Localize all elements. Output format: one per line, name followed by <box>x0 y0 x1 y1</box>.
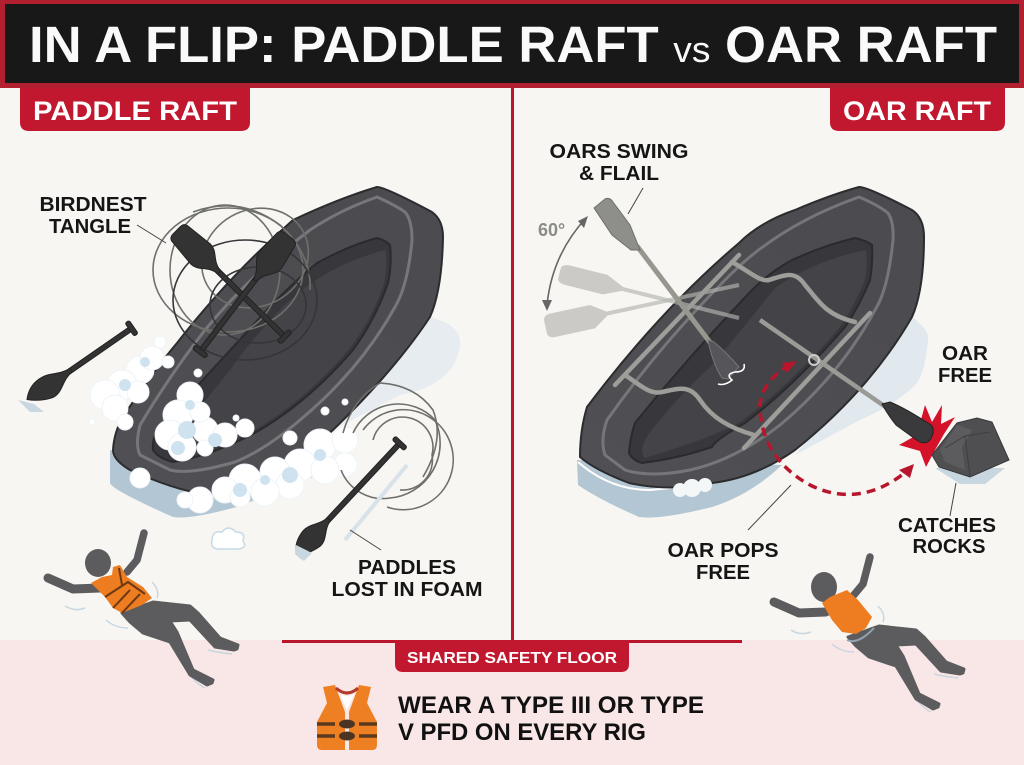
floor <box>629 238 872 463</box>
title: IN A FLIP: PADDLE RAFT vs OAR RAFT <box>29 16 997 73</box>
label: catches rocks: CATCHES <box>898 515 996 537</box>
swimmer left <box>48 533 238 688</box>
label: paddles lost in foam: LOST IN FOAM <box>332 579 482 601</box>
tab: shared safety floor <box>395 640 629 672</box>
oar blade <box>882 402 933 443</box>
raft hull <box>113 187 443 494</box>
oar swinging <box>594 198 744 384</box>
safety floor band <box>0 640 1024 765</box>
lost paddle left <box>18 318 141 412</box>
swimmer life vest <box>91 565 152 613</box>
water shadow <box>795 317 928 455</box>
label: oar free <box>938 343 992 387</box>
safety message: V PFD ON EVERY RIG <box>398 719 646 746</box>
raft floor <box>153 238 391 462</box>
label: oars swing and flail: OARS SWING <box>550 141 688 163</box>
raft tube highlight <box>138 197 412 471</box>
center divider <box>511 86 514 642</box>
label: paddles lost in foam <box>332 557 482 601</box>
swimmer life vest <box>822 590 872 634</box>
label: oar pops free: FREE <box>696 562 750 584</box>
header banner <box>0 0 1024 88</box>
label: oar pops free: OAR POPS <box>668 540 778 562</box>
label: oar free: FREE <box>938 365 992 387</box>
red dashed arc arrow <box>760 365 908 494</box>
label line tangle <box>137 225 166 243</box>
label: catches rocks <box>898 515 996 558</box>
rock <box>932 418 1009 484</box>
swimmer right <box>774 557 964 712</box>
label: paddles lost in foam: PADDLES <box>358 557 456 579</box>
leader lines <box>628 188 956 530</box>
tab: shared safety floor: SHARED SAFETY FLOOR <box>407 650 617 667</box>
tab: oar raft: OAR RAFT <box>843 96 992 126</box>
frame rails <box>615 255 870 448</box>
label: birdnest tangle <box>40 194 146 238</box>
safety message: WEAR A TYPE III OR TYPE <box>398 692 704 719</box>
ghost oars <box>543 264 742 339</box>
impact burst <box>899 405 955 467</box>
tube highlight <box>603 197 893 474</box>
panel: oar raft illustration <box>538 187 1009 530</box>
foam puff <box>212 528 245 549</box>
floor rule <box>282 640 742 643</box>
label: birdnest tangle: BIRDNEST <box>40 194 146 216</box>
tab: paddle raft <box>20 88 250 131</box>
label line paddles <box>350 530 381 550</box>
label: oar free: OAR <box>942 343 989 365</box>
label: birdnest tangle: TANGLE <box>49 216 131 238</box>
tab: oar raft <box>830 88 1005 131</box>
birdnest line tangle <box>153 189 327 360</box>
60 degree sweep arrow <box>538 216 588 311</box>
foam splash <box>673 478 712 497</box>
foam hull and floor <box>89 336 358 513</box>
tab: paddle raft: PADDLE RAFT <box>33 96 238 126</box>
label: catches rocks: ROCKS <box>912 536 986 558</box>
label: oars swing and flail: & FLAIL <box>579 163 659 185</box>
label: oars swing and flail <box>550 141 688 185</box>
oar free <box>760 320 890 410</box>
panel: paddle raft illustration <box>18 187 460 562</box>
swirl lines lower <box>341 383 453 510</box>
lost paddle lower <box>288 434 410 562</box>
icon: life vest <box>317 685 377 750</box>
hull <box>580 187 924 488</box>
60 degree sweep arrow: 60° <box>538 220 565 240</box>
label: oar pops free <box>668 540 778 584</box>
paddles crossed <box>167 220 300 362</box>
safety message <box>398 692 704 746</box>
raft water shadow <box>333 317 460 430</box>
